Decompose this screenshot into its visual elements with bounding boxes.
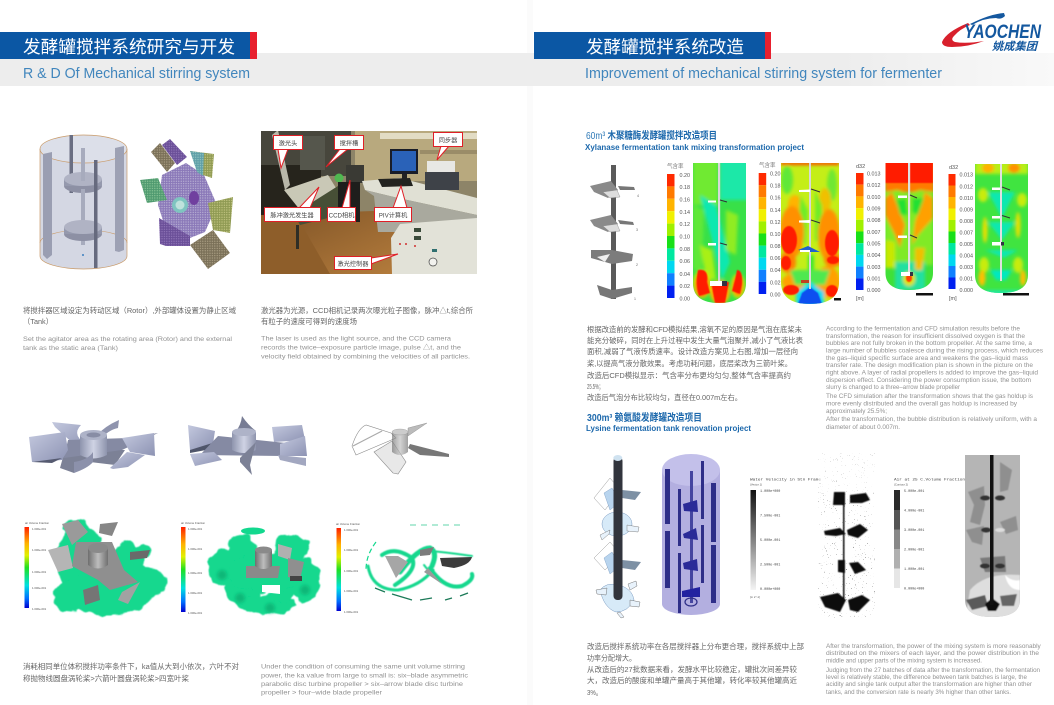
text block: English results of lysine project: acidity and single tank output after the transformation are higher than other xyxy=(826,681,1032,688)
legend: air volume fraction: 1.000e-001 xyxy=(188,527,203,531)
text block: ka value comparison: Under the condition of consuming the same unit volume stirring xyxy=(261,664,465,670)
heading: 60 m3 xylanase project: 60m³ 木聚糖酶发酵罐搅拌改造项目 xyxy=(586,129,717,142)
text block: ka value comparison xyxy=(23,661,469,696)
text block: laser description: The laser is used as the light source, and the CCD camera xyxy=(261,336,451,342)
text block: Chinese explanation of xylanase project: 改造后气泡分布比较均匀，直径在0.007m左右。 xyxy=(587,392,742,402)
text block: Chinese results of lysine project: 功率分配增大。 xyxy=(587,652,636,662)
legend: air volume fraction: 1.000e-001 xyxy=(344,610,359,614)
text block: English explanation of xylanase project: transfer rate. The design modification plan is shown in the picture on the xyxy=(826,362,1034,369)
legend: water velocity: Water Velocity in Stn Frame xyxy=(750,478,821,482)
legend: gas holdup scale: 0.04 xyxy=(770,268,780,274)
legend: d32 scale: 0.003 xyxy=(867,265,880,271)
legend: d32 scale: 0.004 xyxy=(960,254,973,260)
legend: d32 scale: 0.000 xyxy=(960,288,973,294)
callouts: PIV labels xyxy=(264,132,462,270)
text block: English explanation of xylanase project xyxy=(826,326,1043,431)
text block: English results of lysine project: level is relatively stable, the difference between tank batches is large, the xyxy=(826,674,1028,681)
scale bar xyxy=(1003,293,1029,296)
text block: English results of lysine project: After the transformation, the power of the mixing system is more reasonably xyxy=(826,643,1042,650)
figure: lysine tank impeller stack xyxy=(594,455,641,618)
callout: stirred tank: 搅拌槽 xyxy=(340,140,358,148)
legend: d32 scale: 0.004 xyxy=(867,253,880,259)
figure: impeller shaft with four layers xyxy=(590,165,639,301)
text block: English explanation of xylanase project: dispersion effect. Considering the power consumption issue, the bottom xyxy=(826,377,1031,384)
legend: gas holdup scale: 气含率 xyxy=(667,162,684,170)
figure: lysine tank transparent model xyxy=(662,454,720,615)
legend: gas holdup scale: 0.10 xyxy=(680,234,690,240)
text block: ka value comparison: 称抛物线圆盘涡轮桨>六箭叶圆盘涡轮桨>四宽叶桨 xyxy=(23,673,189,683)
photo: PIV laboratory setup xyxy=(261,130,477,274)
figure: air volume fraction, six-blade impeller xyxy=(24,520,167,614)
text block: English explanation of xylanase project: According to the fermentation and CFD simulation results before the xyxy=(826,326,1021,332)
text block: laser description xyxy=(261,305,473,360)
callout: PIV computer: PIV计算机 xyxy=(379,212,408,220)
text block: Chinese explanation of xylanase project: 25.5%； xyxy=(587,382,603,391)
figure: six-arrow blade impeller xyxy=(188,416,307,475)
text block: Chinese results of lysine project: 改造后搅拌系统功率在各层搅拌器上分布更合理，搅拌系统中上部 xyxy=(587,641,804,651)
heading: Chinese title right: 发酵罐搅拌系统改造 xyxy=(586,37,744,57)
legend: gas holdup scale: 0.08 xyxy=(770,244,780,250)
callout: laser head: 激光头 xyxy=(279,140,297,148)
legend: air volume fraction: 3.000e-001 xyxy=(904,529,924,533)
legend: gas holdup scale: 0.06 xyxy=(680,259,690,265)
figure: impeller shaft with four layers: 3 xyxy=(636,228,638,232)
text block: Chinese explanation of xylanase project: 面积,减弱了气液传质速率。设计改造方案见上右图,增加一层径向 xyxy=(587,346,798,356)
chart: d32 before modification xyxy=(856,160,934,302)
text block: Chinese explanation of xylanase project xyxy=(587,324,803,402)
legend: gas holdup scale: 0.00 xyxy=(770,292,780,298)
legend: d32 scale: 0.001 xyxy=(867,276,880,282)
legend: gas holdup scale: 0.20 xyxy=(770,172,780,178)
callout: laser controller: 激光控制器 xyxy=(338,260,369,268)
heading bar: R&D xyxy=(0,32,250,59)
text block: ka value comparison: propeller > four–wide blade propeller xyxy=(261,690,383,696)
figure: impeller shaft with four layers: 2 xyxy=(636,263,638,267)
text block: English explanation of xylanase project: diameter of about 0.007m. xyxy=(826,424,900,431)
heading: 300 m3 lysine project: 300m³ 赖氨酸发酵罐改造项目 xyxy=(587,411,702,424)
figure: four-wide-blade propeller xyxy=(352,423,449,474)
text block: Chinese results of lysine project: 大，改造后的酸度和单罐产量高于其他罐，转化率较其他罐高近 xyxy=(587,675,797,685)
legend: gas holdup scale: 0.08 xyxy=(680,247,690,253)
legend: air volume fraction: 1.000e-001 xyxy=(188,591,203,595)
legend: water velocity: 5.000e-001 xyxy=(760,539,780,543)
text block: Chinese results of lysine project xyxy=(587,641,804,697)
figure: air volume fraction, four-blade propeller xyxy=(336,522,472,614)
text block: English explanation of xylanase project: right above. A layer of radial propellers is added to improve the gas–liquid xyxy=(826,370,1039,376)
header: left section xyxy=(0,32,257,82)
text block: Chinese results of lysine project: 3%。 xyxy=(587,688,602,697)
legend: water velocity: 0.000e+000 xyxy=(760,588,780,592)
legend: water velocity: (Vector 1) xyxy=(750,482,762,486)
legend: air volume fraction: 4.000e-001 xyxy=(904,510,924,514)
legend: gas holdup scale xyxy=(759,161,780,298)
legend: d32 scale: 0.009 xyxy=(867,206,880,212)
heading: 300 m3 lysine project xyxy=(586,411,751,433)
text block: English results of lysine project xyxy=(826,643,1042,696)
legend: d32 scale: 0.007 xyxy=(867,230,880,236)
text block: rotor and tank description: Set the agitator area as the rotating area (Rotor) and the external xyxy=(23,336,233,343)
legend: air volume fraction: 1.000e-001 xyxy=(32,607,47,611)
legend: air volume fraction: Air at 25 C.Volume Fraction xyxy=(894,478,965,482)
text block: English explanation of xylanase project: After the transformation, the bubble distribution is relatively uniform, with a xyxy=(826,416,1038,423)
legend: d32 scale: 0.013 xyxy=(867,172,880,178)
legend: gas holdup scale: 0.06 xyxy=(770,256,780,262)
text block: English results of lysine project: distributed on the mixers of each layer, and the power distribution in the xyxy=(826,650,1040,657)
text block: Chinese results of lysine project: 从改造后的27批数据来看，发酵水平比较稳定，罐批次间差异较 xyxy=(587,664,797,674)
legend: d32 scale: 0.003 xyxy=(960,265,973,271)
legend: gas holdup scale: 0.04 xyxy=(680,272,690,278)
callout: synchroniser: 同步器 xyxy=(439,136,458,144)
legend: d32 scale: d32 xyxy=(856,164,865,170)
legend: air volume fraction: air Volume Fraction xyxy=(336,522,361,526)
legend: d32 scale: 0.013 xyxy=(960,172,973,178)
legend: d32 scale: 0.007 xyxy=(960,230,973,236)
heading: 60 m3 xylanase project: Xylanase fermentation tank mixing transformation project xyxy=(585,143,804,152)
legend: air volume fraction: 1.000e-001 xyxy=(344,548,359,552)
legend: d32 scale: 0.008 xyxy=(960,219,973,225)
text block: English explanation of xylanase project: approximately 25.5%; xyxy=(826,408,887,415)
text block: English explanation of xylanase project: The CFD simulation after the transformation shows that the gas holdup is xyxy=(826,393,1033,400)
chart: gas holdup after modification xyxy=(759,161,842,310)
callout: CCD camera xyxy=(328,180,356,222)
text block: English explanation of xylanase project: large number of bubbles coalesce during the rising process, which reduces xyxy=(826,348,1043,354)
legend: d32 scale: d32 xyxy=(949,165,958,171)
text block: ka value comparison: parabolic disc turbine propeller > six–arrow blade disc turbine xyxy=(261,681,463,688)
text block: rotor and tank description: （Tank） xyxy=(23,317,53,326)
legend: d32 scale: [m] xyxy=(856,296,864,302)
callout: pulse laser generator: 脉冲激光发生器 xyxy=(270,212,314,220)
text block: laser description: 有粒子的速度可得到的速度场 xyxy=(261,316,357,326)
legend: air volume fraction: 1.000e-001 xyxy=(32,570,47,574)
legend: gas holdup scale: 气含率 xyxy=(759,161,776,169)
legend: gas holdup scale: 0.16 xyxy=(680,198,690,204)
header: right section xyxy=(534,32,942,82)
text block: English explanation of xylanase project: slurry is changed to a three–arrow blade propeller xyxy=(826,384,960,391)
legend: air volume fraction: 1.000e-001 xyxy=(32,527,47,531)
legend: d32 scale: 0.009 xyxy=(960,208,973,214)
accent: red block right xyxy=(765,32,771,59)
chart: d32 after modification xyxy=(948,162,1029,302)
legend: air volume fraction: 1.000e-001 xyxy=(32,548,47,552)
legend: gas holdup scale: 0.18 xyxy=(770,184,780,190)
text block: English results of lysine project: Judging from the 27 batches of data after the transformation, the fermentation xyxy=(826,667,1041,674)
callout: stirred tank xyxy=(326,136,364,167)
legend: air volume fraction: 1.000e-001 xyxy=(344,569,359,573)
legend: gas holdup scale: 0.14 xyxy=(680,210,690,216)
heading: Chinese title left: 发酵罐搅拌系统研究与开发 xyxy=(23,37,235,57)
legend: gas holdup scale: 0.14 xyxy=(770,208,780,214)
callout: synchroniser xyxy=(434,132,462,160)
text block: ka value comparison: power, the ka value from large to small is: six–blade asymmetric xyxy=(261,672,469,680)
legend: water velocity: [m s^-1] xyxy=(750,595,760,599)
scale bar xyxy=(916,293,933,296)
callout: laser head xyxy=(274,136,302,168)
legend: gas holdup scale: 0.20 xyxy=(680,173,690,179)
text block: rotor and tank description: 将搅拌器区域设定为转动区域（Rotor）,外部罐体设置为静止区域 xyxy=(23,305,236,315)
text block: Chinese explanation of xylanase project: 桨,以提高气液分散效果。考虑功耗问题，底层桨改为三箭叶桨。 xyxy=(587,358,792,368)
legend: d32 scale: 0.000 xyxy=(867,288,880,294)
legend: gas holdup scale xyxy=(667,162,690,302)
legend: d32 scale: 0.012 xyxy=(960,184,973,190)
legend: gas holdup scale: 0.16 xyxy=(770,196,780,202)
legend: air volume fraction xyxy=(894,478,965,592)
legend: d32 scale: 0.010 xyxy=(960,196,973,202)
legend: air volume fraction: 1.000e-001 xyxy=(32,586,47,590)
text block: English results of lysine project: middle and upper parts of the mixing system is increased. xyxy=(826,658,982,664)
text block: rotor and tank description: tank as the static area (Tank) xyxy=(23,345,118,352)
legend: gas holdup scale: 0.10 xyxy=(770,232,780,238)
legend: water velocity: 1.000e+000 xyxy=(760,490,780,494)
text block: rotor and tank description xyxy=(23,305,236,352)
accent: red block xyxy=(250,32,257,59)
legend: air volume fraction: 1.000e-001 xyxy=(904,568,924,572)
subheading: English title left: R & D Of Mechanical stirring system xyxy=(23,66,250,82)
legend: d32 scale: 0.001 xyxy=(960,276,973,282)
text block: English explanation of xylanase project: bubbles are not fully broken in the bottom propeller. At the same time, a xyxy=(826,340,1033,347)
heading bar: improvement xyxy=(534,32,765,59)
callout: laser controller xyxy=(334,254,398,270)
text block: ka value comparison: 消耗相同单位体积搅拌功率条件下，ka值从大到小依次，六叶不对 xyxy=(23,661,239,671)
chart: water velocity vectors xyxy=(818,453,875,620)
legend: d32 scale: 0.012 xyxy=(867,183,880,189)
text block: Chinese explanation of xylanase project: 根据改造前的发酵和CFD模拟结果,溶氧不足的原因是气泡在底桨未 xyxy=(587,324,802,334)
legend: d32 scale: 0.008 xyxy=(867,218,880,224)
callout: PIV computer xyxy=(374,186,412,222)
text block: English explanation of xylanase project: more evenly distributed and the overall gas holdup is increased by xyxy=(826,401,1018,408)
text block: laser description: 激光器为光源，CCD相机记录两次曝光粒子图像，脉冲△t,综合所 xyxy=(261,305,473,315)
legend: gas holdup scale: 0.12 xyxy=(680,222,690,228)
legend: gas holdup scale: 0.12 xyxy=(770,220,780,226)
legend: water velocity: 7.500e-001 xyxy=(760,514,780,518)
text block: English results of lysine project: tanks, and the conversion rate is nearly 3% higher than other tanks. xyxy=(826,689,1011,696)
legend: d32 scale: 0.005 xyxy=(867,242,880,248)
chart: gas holdup before modification xyxy=(667,160,748,306)
legend: gas holdup scale: 0.02 xyxy=(680,284,690,290)
callout: CCD camera: CCD相机 xyxy=(329,212,355,220)
legend: air volume fraction xyxy=(181,521,206,615)
legend: d32 scale xyxy=(948,165,973,302)
legend: air volume fraction: 0.000e+000 xyxy=(904,588,924,592)
legend: air volume fraction: 1.000e-001 xyxy=(188,611,203,615)
legend: d32 scale xyxy=(856,164,880,302)
text block: English explanation of xylanase project: transformation, the reason for insufficient dissolved oxygen is that the xyxy=(826,333,1026,340)
text block: laser description: records the twice–exposure particle image, pulse △t, and the xyxy=(261,342,461,352)
logo: YAOCHEN: 姚成集团 xyxy=(992,40,1039,53)
legend: air volume fraction xyxy=(24,521,50,611)
legend: air volume fraction: 1.000e-001 xyxy=(344,589,359,593)
figure: tank with rotor and static zones xyxy=(40,135,127,269)
legend: air volume fraction: 1.000e-001 xyxy=(344,528,359,532)
logo: YAOCHEN xyxy=(942,13,1042,53)
legend: air volume fraction: (Contour 2) xyxy=(894,482,908,486)
figure: air volume fraction, six-arrow impeller xyxy=(181,521,319,615)
legend: d32 scale: 0.005 xyxy=(960,242,973,248)
legend: water velocity xyxy=(750,478,821,599)
scale bar xyxy=(834,298,841,300)
figure: impeller shaft with four layers: 4 xyxy=(637,194,639,198)
figure: six-blade asymmetric parabolic impeller xyxy=(29,420,158,473)
subheading: English title right: Improvement of mechanical stirring system for fermenter xyxy=(585,66,942,82)
heading: 300 m3 lysine project: Lysine fermentation tank renovation project xyxy=(586,424,751,433)
legend: water velocity: 2.500e-001 xyxy=(760,564,780,568)
heading: 60 m3 xylanase project xyxy=(585,129,804,152)
legend: air volume fraction: 5.000e-001 xyxy=(904,490,924,494)
text block: English explanation of xylanase project: the gas–liquid specific surface area and weakens the gas–liquid mass xyxy=(826,355,1028,362)
legend: air volume fraction: air Volume Fraction xyxy=(25,521,50,525)
text block: Chinese explanation of xylanase project: 能充分破碎，同时在上升过程中发生大量气泡聚并,减小了气液比表 xyxy=(587,335,803,345)
legend: air volume fraction xyxy=(336,522,361,614)
legend: air volume fraction: 1.000e-001 xyxy=(188,547,203,551)
figure: meshed impeller xyxy=(140,139,233,269)
figure: impeller shaft with four layers: 1 xyxy=(634,297,636,301)
legend: gas holdup scale: 0.02 xyxy=(770,280,780,286)
legend: air volume fraction: air Volume Fraction xyxy=(181,521,206,525)
chart: air fraction contour xyxy=(965,455,1020,620)
legend: gas holdup scale: 0.18 xyxy=(680,185,690,191)
legend: air volume fraction: 2.000e-001 xyxy=(904,548,924,552)
legend: gas holdup scale: 0.00 xyxy=(680,296,690,302)
callout: pulse laser generator xyxy=(264,187,320,222)
text block: Chinese explanation of xylanase project: 改造后CFD模拟显示：气含率分布更均匀匀,整体气含率提高约 xyxy=(587,370,791,380)
legend: air volume fraction: 1.000e-001 xyxy=(188,571,203,575)
legend: d32 scale: 0.010 xyxy=(867,195,880,201)
text block: laser description: velocity field obtained by combining the velocities of all particles. xyxy=(261,354,470,360)
legend: d32 scale: [m] xyxy=(949,296,957,302)
